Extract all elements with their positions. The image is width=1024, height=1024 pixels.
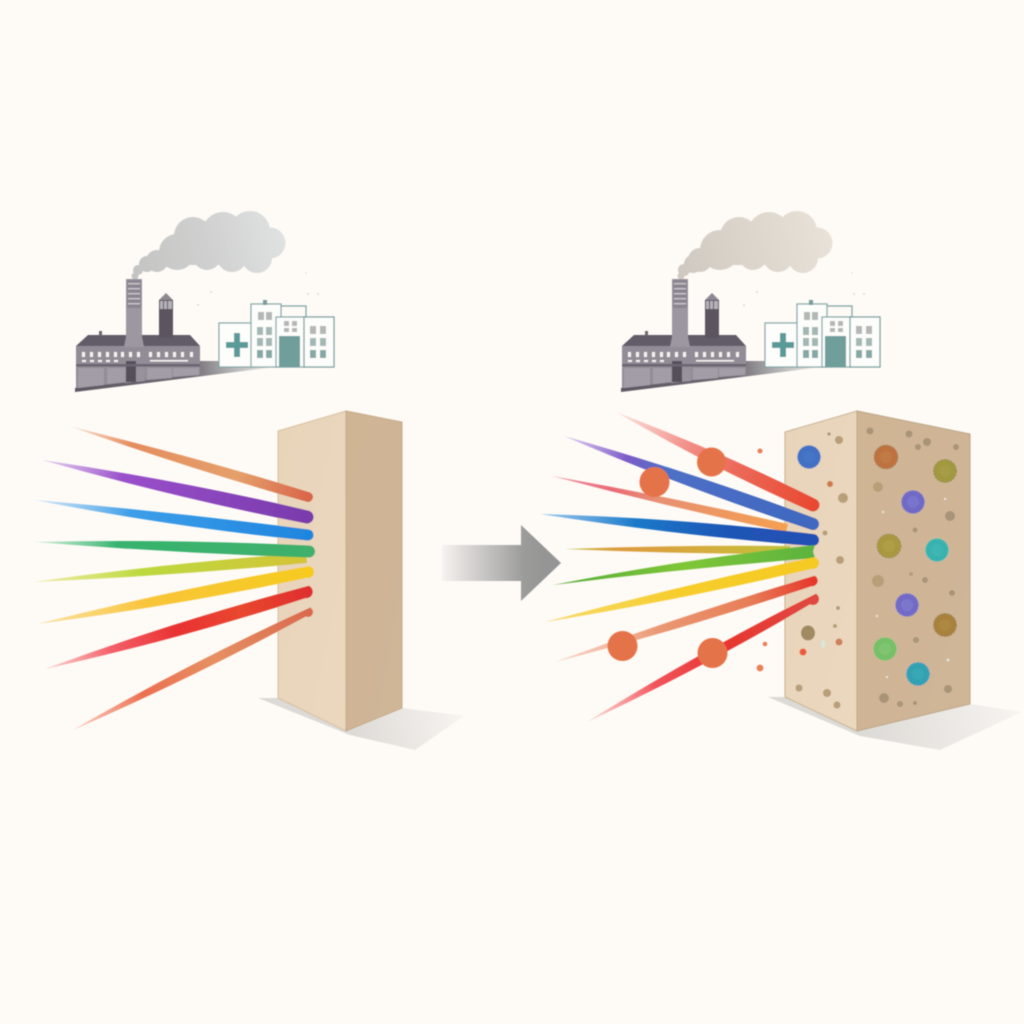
panel: intact barrier scene — [33, 211, 464, 750]
factory and hospital — [75, 272, 334, 392]
embedded gems — [798, 445, 956, 686]
coloured rays entering wall — [540, 413, 820, 722]
captured particles on rays — [608, 448, 728, 668]
cloud of emissions — [132, 211, 286, 280]
porous wall — [785, 411, 970, 731]
factory and hospital — [621, 272, 880, 392]
barrier wall — [278, 411, 402, 731]
arrow — [442, 525, 561, 601]
wall shadow — [768, 697, 1022, 750]
wall shadow — [258, 698, 464, 750]
cloud of emissions, tinted — [678, 211, 832, 280]
small scattered particles — [757, 448, 767, 671]
pores — [796, 428, 959, 708]
coloured rays entering wall — [33, 427, 315, 730]
panel: porous barrier scene — [540, 211, 1022, 750]
